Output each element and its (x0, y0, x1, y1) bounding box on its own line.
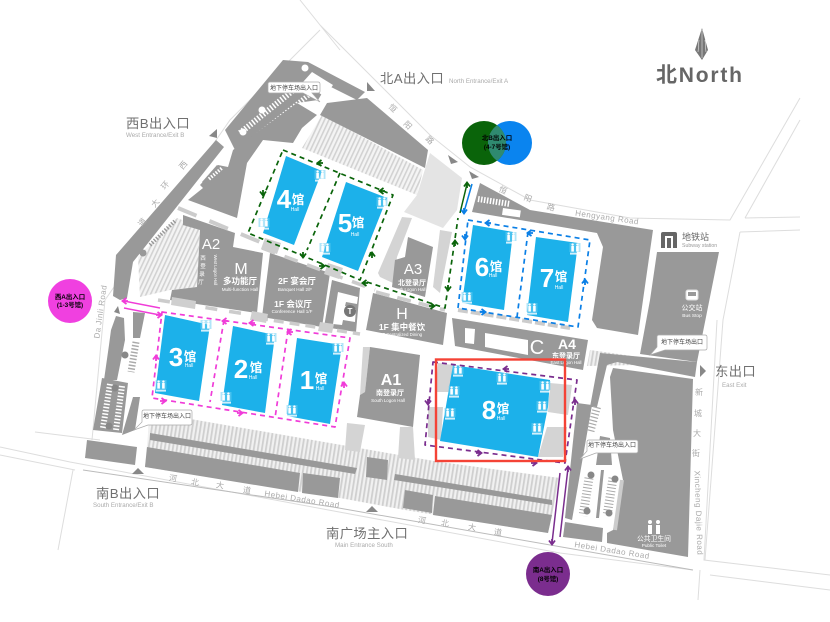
hall 2: 2 (234, 354, 248, 384)
hall 6: Hall (489, 273, 497, 279)
panel: banquet and conference hall: Conference Hall 1/F (272, 309, 313, 314)
callout circle: south A entrance: (8号馆) (538, 574, 558, 583)
hall 8: Hall (497, 416, 505, 422)
hall 1: 馆 (315, 371, 327, 386)
callout: east parking exit (650, 335, 707, 355)
hall 5 (320, 182, 388, 271)
panel: C and A4 east logon hall: A4 (558, 336, 576, 352)
callout: top parking (268, 82, 320, 102)
callout circle: south A entrance (526, 552, 570, 596)
road names: 路 (424, 134, 436, 146)
panel: T block: T (348, 307, 353, 316)
panel: C and A4 east logon hall: East Logon Hall (550, 360, 582, 365)
logo: north (656, 28, 744, 87)
callout circle: north B entrance: 北B出入口 (482, 133, 512, 142)
plaza: north light area (404, 153, 462, 228)
callout: west parking (134, 410, 192, 430)
panel: M multi-function hall (222, 261, 258, 292)
label: east exit: East Exit (722, 382, 747, 389)
label: west entrance B: 西B出入口 (126, 116, 190, 131)
callout circle: west A entrance (48, 279, 92, 323)
label: main entrance south: 南广场主入口 (326, 526, 408, 541)
west parking blocks (93, 312, 145, 435)
hall 1: Hall (316, 386, 324, 392)
road names: 恒 (387, 102, 399, 114)
road names: 阳 (523, 193, 533, 204)
hall 8: 馆 (497, 401, 509, 416)
icon: bus stop (682, 290, 702, 319)
icon: subway station: 地铁站 (682, 231, 709, 242)
road names: 河 (417, 514, 427, 526)
hall 2: 馆 (250, 360, 262, 375)
panel: C and A4 east logon hall: C (530, 337, 544, 359)
panel: H dining (366, 293, 447, 345)
hall 7 (526, 237, 580, 322)
panel: A3 north logon hall: North Logon Hall (393, 287, 425, 292)
plaza: south hatched (145, 412, 560, 533)
label: north entrance A: North Entrance/Exit A (449, 78, 509, 85)
label: west entrance B (126, 116, 190, 139)
east blocks (565, 353, 697, 557)
route: pink, halls 1 to 3 (122, 298, 350, 427)
label: west entrance B: West Entrance/Exit B (126, 132, 184, 139)
road names: 环 (159, 179, 171, 191)
label: south entrance B: 南B出入口 (96, 486, 160, 501)
route: green, halls 4 and 5 (248, 150, 470, 309)
callout circle: south A entrance: 南A出入口 (533, 565, 563, 574)
light wings of hall 8 (428, 363, 572, 457)
hall 7: 7 (540, 263, 554, 293)
hall 3 (155, 315, 212, 401)
road names: 北 (190, 477, 200, 488)
hall 6: 馆 (490, 259, 502, 274)
label: east exit (715, 364, 756, 389)
hall 4: 馆 (292, 192, 304, 207)
hall 2: Hall (249, 375, 257, 381)
panel: C and A4 east logon hall (452, 318, 640, 370)
road names: 新 (695, 387, 703, 397)
callout circle: west A entrance: (1-3号馆) (57, 300, 83, 309)
panel: A3 north logon hall (378, 217, 452, 297)
hall 7: 馆 (555, 269, 567, 284)
route: blue, halls 6 and 7 (458, 184, 590, 327)
hall 1 (286, 338, 344, 424)
panel: A1 south logon hall: South Logon Hall (371, 398, 405, 403)
callout: top parking: 地下停车场出入口 (270, 84, 318, 92)
panel: A2 west logon hall: 厅 (198, 279, 204, 286)
callout: west parking: 地下停车场出入口 (143, 412, 191, 420)
hall 4: 4 (277, 184, 292, 214)
callout circle: west A entrance: 西A出入口 (55, 292, 85, 301)
label: main entrance south (326, 526, 408, 549)
callout: south-east parking: 地下停车场出入口 (588, 441, 636, 449)
plaza: north hatched (302, 115, 423, 195)
road names: 大 (149, 197, 161, 209)
icon: bus stop: 公交站 (682, 303, 702, 312)
hall 8 (440, 365, 550, 457)
hall 7: Hall (555, 285, 563, 291)
road names: Hebei Dadao Road (574, 540, 650, 561)
hall 5: 5 (338, 208, 352, 238)
hall 8: 8 (482, 395, 496, 425)
road names (92, 102, 704, 561)
road names: Hengyang Road (575, 209, 640, 226)
panel: A1 south logon hall: A1 (381, 372, 401, 389)
panel: banquet and conference hall: 1F 会议厅 (274, 299, 312, 309)
hall 4: Hall (291, 207, 299, 213)
road names: 道 (242, 484, 252, 496)
panel: A1 south logon hall: 南登录厅 (376, 388, 404, 397)
label: north entrance A: 北A出入口 (380, 71, 444, 86)
road names: 街 (692, 448, 700, 458)
panel: A3 north logon hall: A3 (404, 261, 422, 278)
icon: public toilet (637, 520, 671, 548)
road names: 道 (493, 526, 503, 538)
panel: A3 north logon hall: 北登录厅 (398, 278, 426, 287)
panel: A2 west logon hall: A2 (202, 236, 220, 253)
label: south entrance B: South Entrance/Exit B (93, 502, 154, 509)
callout circle: north B entrance: (4-7号馆) (484, 142, 510, 151)
panel: A2 west logon hall: 西 (200, 255, 206, 262)
west and north road blocks (113, 60, 428, 300)
callout circle: north B entrance (462, 121, 532, 165)
panel: A2 west logon hall: West Logon Hall (213, 255, 218, 285)
road names: 河 (168, 472, 178, 484)
route: purple, hall 8 (425, 362, 578, 544)
panel: A1 south logon hall (345, 347, 420, 460)
entrance triangles (114, 82, 706, 512)
entrance doors (158, 208, 570, 334)
hall 3: 3 (169, 342, 183, 372)
road names: 大 (467, 521, 477, 533)
road names: 阳 (402, 119, 414, 131)
label: south entrance B (93, 486, 160, 509)
panel: T block (324, 280, 360, 332)
icon: subway station (661, 231, 717, 249)
hall 2 (220, 326, 276, 413)
hall 4 (258, 156, 326, 245)
icon: public toilet: Public Toilet (642, 543, 667, 548)
label: main entrance south: Main Entrance South (335, 542, 393, 549)
south blocks (85, 433, 603, 542)
panel: M multi-function hall: 多功能厅 (223, 276, 257, 286)
road names: 路 (546, 201, 556, 213)
panel: A2 west logon hall: 录 (199, 270, 205, 278)
road names: 北 (440, 518, 450, 529)
panel: H dining: 1F 集中餐饮 (379, 322, 426, 332)
panel: banquet and conference hall: Banquet Hall 2/F (278, 287, 312, 292)
hall 6 (462, 225, 516, 310)
label: east exit: 东出口 (715, 364, 756, 379)
panel: A2 west logon hall (138, 215, 263, 313)
panel: banquet and conference hall: 2F 宴会厅 (278, 276, 316, 286)
panel: H dining: H (396, 306, 408, 323)
icon: bus stop: Bus Stop (682, 313, 702, 319)
hall 5: 馆 (352, 215, 364, 230)
hall 1: 1 (300, 365, 314, 395)
panel: C and A4 east logon hall: 东登录厅 (552, 351, 580, 360)
hall 3: Hall (185, 363, 193, 369)
icon: public toilet: 公共卫生间 (637, 534, 671, 543)
panel: M multi-function hall: Multi-function Hall (222, 287, 258, 292)
road names: Da Jinli Road (92, 284, 109, 339)
logo: north: 北North (656, 64, 744, 87)
road names: 大 (693, 428, 701, 438)
panel: banquet and conference hall (262, 253, 330, 327)
hall 3: 馆 (184, 349, 196, 364)
icon: subway station: Subway station (682, 243, 717, 249)
road names: 恒 (497, 184, 509, 196)
panel: M multi-function hall: M (234, 261, 248, 278)
hall 5: Hall (351, 232, 359, 238)
road names: Xincheng Dajie Road (693, 470, 704, 555)
road names: 西 (177, 159, 189, 171)
north-east blocks (472, 183, 719, 362)
label: north entrance A (380, 71, 509, 86)
road names: Hebei Dadao Road (264, 489, 340, 510)
panel: H dining: 1F Centralized Dining (380, 332, 423, 337)
hall 6: 6 (475, 252, 489, 282)
panel: A2 west logon hall: 登 (200, 262, 206, 270)
road names: 道 (136, 216, 148, 228)
road names: 城 (694, 409, 702, 418)
callout: east parking exit: 地下停车场出口 (661, 338, 703, 346)
red highlight box around hall 8 (436, 360, 565, 461)
callout: south-east parking (580, 440, 638, 459)
road names: 大 (215, 479, 225, 491)
